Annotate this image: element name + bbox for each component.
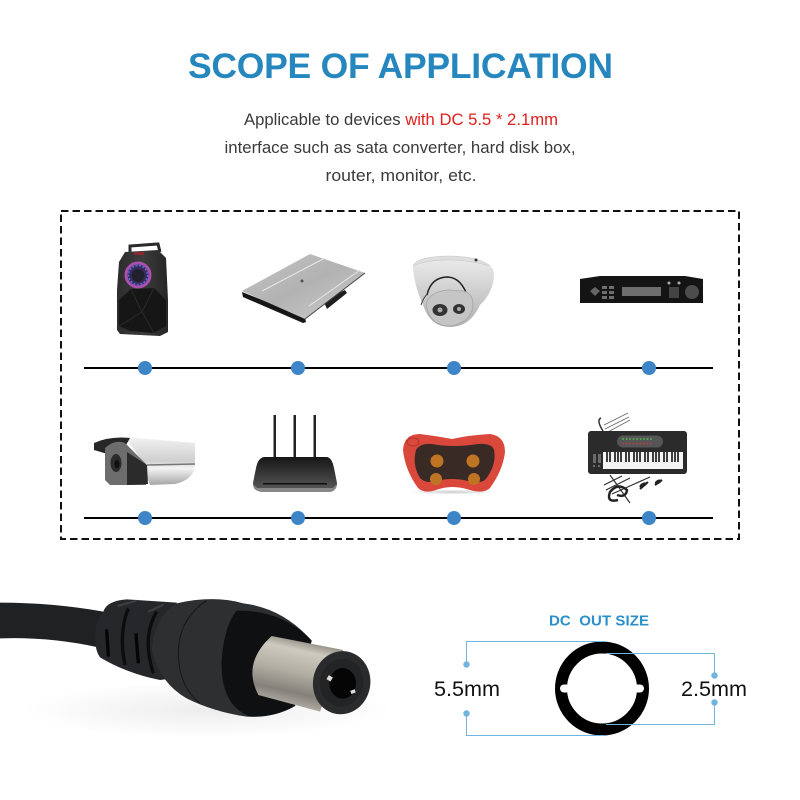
description text: Applicable to devices with DC 5.5 * 2.1mm: [244, 110, 558, 129]
label: 2.5mm: 2.5mm: [681, 677, 747, 701]
tip: [308, 647, 375, 719]
icon: wifi router: [253, 415, 337, 492]
description text: router, monitor, etc.: [326, 166, 476, 185]
description text: interface such as sata converter, hard disk box,: [224, 138, 576, 157]
connector ring: [560, 648, 644, 730]
icon: party speaker: [117, 244, 168, 336]
timeline row 1: [84, 361, 713, 375]
strain relief: [95, 599, 187, 680]
heading: DC out size: DC OUT SIZE: [549, 612, 649, 630]
cable: [0, 603, 103, 647]
molded collar: [152, 599, 312, 717]
icon: massage pillow: [403, 434, 505, 494]
icon: dome camera: [413, 256, 494, 327]
icon: bullet camera: [94, 437, 195, 485]
title: SCOPE OF APPLICATION: [188, 46, 613, 86]
diagram: DC out size: [434, 612, 747, 736]
icon: flatbed scanner: [242, 254, 365, 323]
icon: electronic keyboard with notes: [588, 413, 687, 503]
panel: compatible devices: [61, 211, 739, 539]
bracket: inner diameter: [606, 654, 718, 724]
timeline row 2: [84, 511, 713, 525]
icon: audio receiver: [580, 276, 703, 303]
label: 5.5mm: 5.5mm: [434, 677, 500, 701]
photo: DC barrel connector: [0, 599, 393, 738]
bracket: outer diameter: [463, 642, 605, 736]
metal barrel: [252, 636, 343, 712]
description text: [224, 110, 576, 185]
